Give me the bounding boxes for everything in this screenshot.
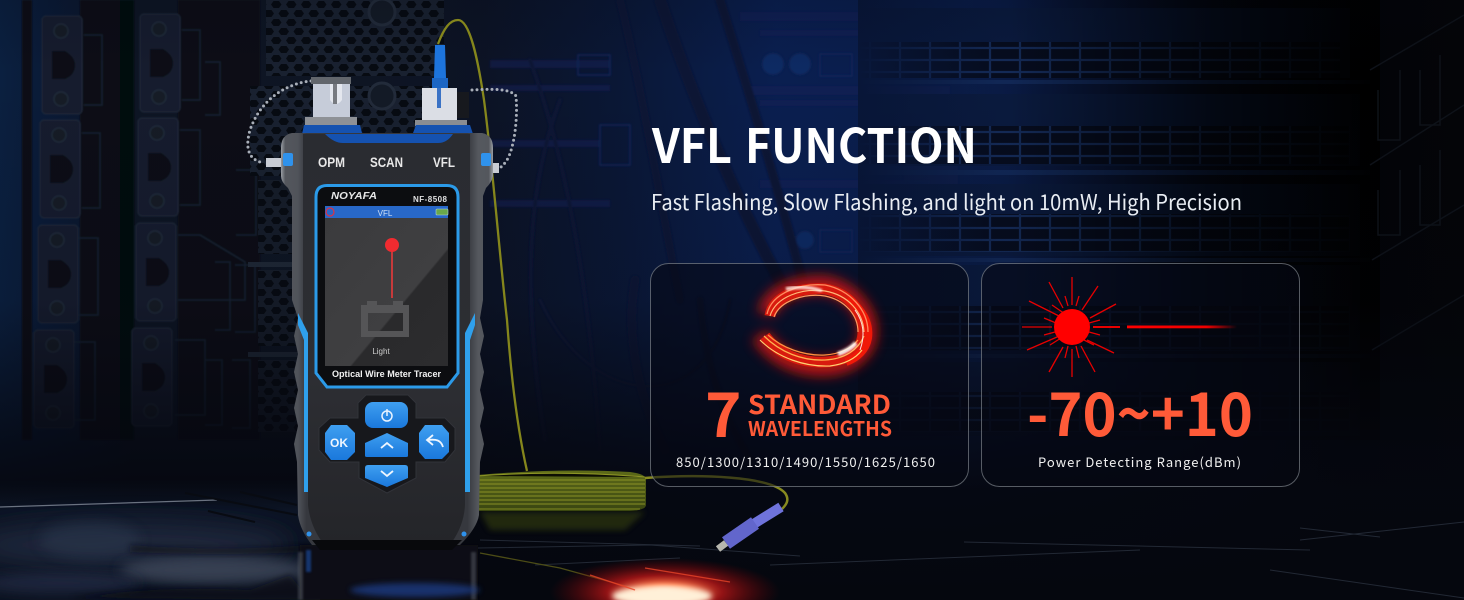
port labels: VFL: [433, 154, 455, 170]
blue top cap: [302, 125, 473, 134]
panel: power range: [982, 264, 1300, 486]
yellow fiber cable: [438, 20, 527, 471]
floor with reflections: [0, 480, 1464, 600]
power button: [365, 402, 408, 428]
right connector: [415, 45, 469, 126]
port labels: SCAN: [370, 154, 403, 170]
stat: 7: 7: [705, 365, 742, 455]
icon: red laser burst: [1022, 277, 1237, 377]
screen bezel: [316, 186, 458, 387]
device: NF-8508 tester: [248, 45, 517, 550]
fiber coil: [477, 471, 646, 530]
body: [281, 133, 493, 545]
OK button: OK: [330, 436, 348, 450]
port labels: OPM: [318, 154, 345, 170]
back button: [419, 425, 449, 459]
central rack hardware: [490, 0, 958, 460]
side clasps: [283, 153, 293, 166]
left server rack: [22, 0, 260, 440]
keypad: [319, 395, 455, 493]
port labels: [318, 154, 455, 170]
device: NF-8508 tester: Optical Wire Meter Tracer: [332, 369, 441, 379]
right server rack: [858, 0, 1464, 440]
left connector: [305, 77, 357, 125]
label: standard wavelengths: [748, 385, 892, 442]
status bar: [325, 206, 448, 218]
LCD screen: [325, 218, 448, 366]
brand and model: NOYAFA: [331, 191, 377, 202]
heading: VFL: [651, 108, 732, 177]
device: NF-8508 tester: VFL: [378, 209, 393, 218]
wavelength list: 850/1300/1310/1490/1550/1625/1650: [676, 452, 935, 471]
floor tile lines: [478, 522, 1464, 598]
panel: wavelengths: [650, 264, 968, 486]
bottom shadow: [312, 540, 462, 550]
device: NF-8508 tester: Light: [372, 347, 390, 356]
label: standard wavelengths: WAVELENGTHS: [748, 413, 892, 442]
laser indicator: [391, 245, 393, 298]
stat: power range: -70~+10: [1027, 367, 1253, 454]
heading: FUNCTION: [745, 108, 977, 177]
label: power detecting range: Power Detecting Range(dBm): [1038, 452, 1241, 471]
ball chains: [248, 81, 517, 170]
light icon: [361, 301, 409, 337]
up button: [365, 433, 408, 457]
icon: red light ring: [760, 285, 868, 367]
red light reflection on floor: [550, 558, 780, 600]
down button: [365, 465, 408, 487]
label: standard wavelengths: STANDARD: [748, 385, 891, 422]
device reflection: [300, 545, 478, 600]
hex mesh panels: [248, 0, 450, 432]
device: NF-8508 tester: NF-8508: [413, 195, 448, 204]
subheading: Fast Flashing, Slow Flashing, and light on 10mW, High Precision: [651, 186, 1242, 217]
OK button: [325, 425, 355, 460]
fiber lead and blue connector: [645, 476, 787, 549]
heading: [651, 108, 977, 177]
side blue strips: [298, 313, 308, 492]
